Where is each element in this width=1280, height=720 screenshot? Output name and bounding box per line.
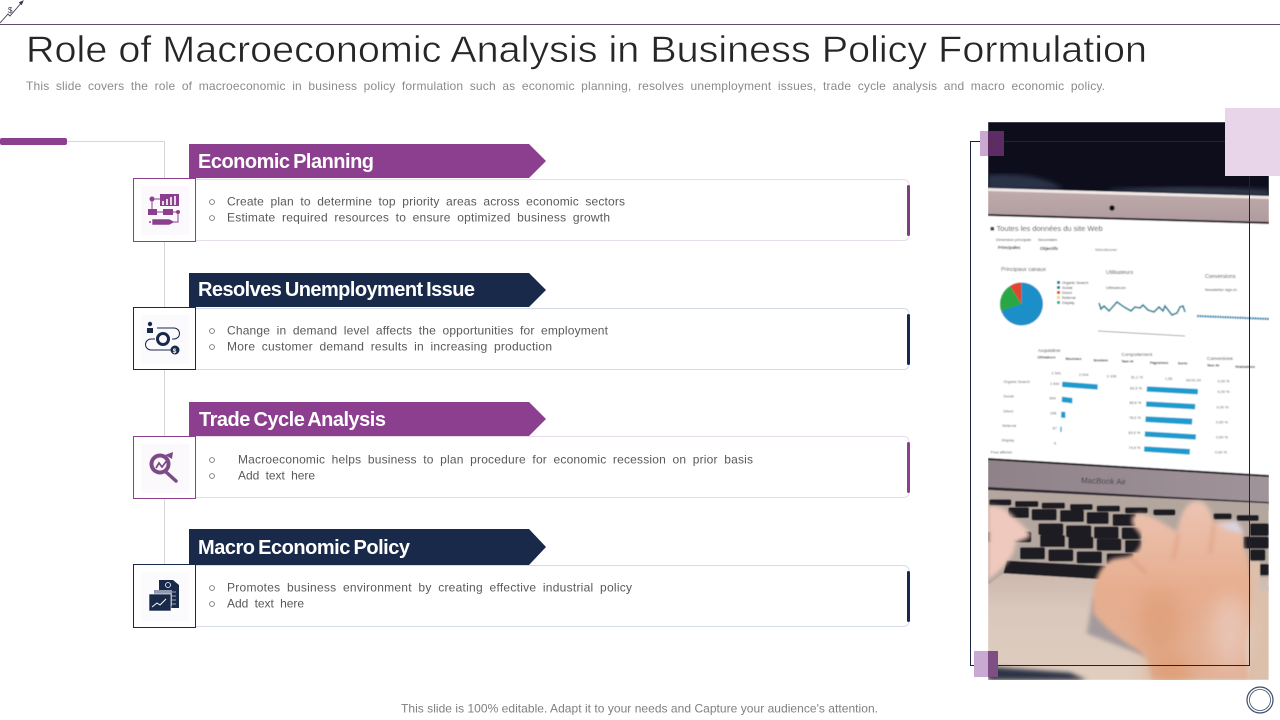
- subtitle: This slide covers the role of macroeconomic in business policy formulation such as economic planning, resolves unemployment issues, trade cycle analysis and macro economic policy.: [26, 79, 1105, 93]
- icon: double ring: [1247, 687, 1273, 713]
- icon: dollar growth arrow: [0, 1, 23, 23]
- dashboard table: Organic Search: [1003, 380, 1030, 384]
- dashboard text: Principaux canaux: [1001, 267, 1046, 273]
- dashboard table: 74,6 %: [1129, 446, 1141, 450]
- footer note: This slide is 100% editable. Adapt it to your needs and Capture your audience's attention.: [401, 702, 878, 716]
- line chart: [1098, 302, 1269, 336]
- dashboard table: 0,00 %: [1216, 436, 1229, 440]
- icon: people and gear: [134, 308, 196, 370]
- dashboard text: Principales: [998, 245, 1021, 250]
- dashboard table: 1,55: [1165, 377, 1172, 381]
- dashboard table: 1 640: [1050, 382, 1060, 386]
- dashboard text: ■ Toutes les données du site Web: [990, 224, 1103, 233]
- left hand: [988, 506, 1030, 581]
- pie legend: Direct: [1062, 291, 1073, 295]
- dashboard table: Nouveaux: [1066, 357, 1082, 361]
- heading arrow: macro economic policy: [189, 529, 546, 565]
- card body: [190, 436, 910, 498]
- dashboard table: 78,0 %: [1129, 416, 1142, 420]
- dashboard table: Comportement: [1121, 352, 1153, 357]
- laptop base: [988, 459, 1269, 510]
- keyboard: [988, 490, 1269, 592]
- photo frame outline: [970, 142, 1250, 666]
- dashboard text: Sélectionner: [1095, 247, 1118, 252]
- icon: dollar growth arrow: $: [8, 6, 13, 15]
- dashboard table: 82,9 %: [1130, 386, 1143, 390]
- icon: planning flow: [134, 178, 196, 242]
- dashboard table: Referral: [1002, 424, 1016, 428]
- bullet list: Promotes business environment by creating effective industrial policy: [227, 580, 632, 594]
- pie legend: Display: [1062, 301, 1075, 305]
- dashboard table: 3 108: [1107, 374, 1116, 378]
- bullet list: Create plan to determine top priority areas across economic sectors: [227, 194, 625, 208]
- timeline accent bar: [0, 138, 67, 145]
- dashboard text: Newsletter sign-in: [1205, 287, 1237, 292]
- dashboard text: [990, 224, 1237, 292]
- dashboard table: Pages/sess.: [1150, 361, 1169, 365]
- bullet list: Change in demand level affects the opportunities for employment: [227, 324, 609, 338]
- macbook label: MacBook Air: [1081, 476, 1126, 487]
- dashboard table: Réalisations: [1235, 365, 1255, 369]
- card body: [190, 566, 910, 626]
- bullet list: [210, 452, 753, 482]
- icon: magnifier with trend: [134, 436, 196, 498]
- bullet list: [210, 194, 625, 224]
- dashboard table: [991, 348, 1255, 455]
- title: Role of Macroeconomic Analysis in Business Policy Formulation: [26, 29, 1147, 70]
- dashboard table: Social: [1003, 395, 1014, 399]
- dashboard table: Utilisateurs: [1037, 356, 1056, 360]
- dashboard table: 6: [1054, 442, 1056, 446]
- dashboard table: 2 541: [1052, 372, 1061, 376]
- bullet list: Macroeconomic helps business to plan procedure for economic recession on prior basis: [238, 452, 753, 466]
- dashboard text: Utilisateurs: [1106, 285, 1126, 290]
- dashboard table: 81,1 %: [1131, 376, 1144, 380]
- dashboard table: Direct: [1003, 409, 1014, 413]
- screen bezel background: [988, 122, 1269, 202]
- dashboard table: Acquisition: [1038, 348, 1061, 353]
- dashboard table: Sessions: [1093, 358, 1108, 362]
- dashboard table: Pour afficher: [991, 450, 1013, 454]
- heading arrow: economic planning: Economic Planning: [198, 151, 374, 173]
- dashboard text: Utilisateurs: [1106, 270, 1133, 276]
- dashboard table: Taux de: [1207, 364, 1219, 368]
- photo: laptop with analytics dashboard: [988, 122, 1269, 685]
- heading arrow: trade cycle analysis: [189, 402, 546, 436]
- card body: [190, 180, 910, 240]
- card body: [190, 308, 910, 370]
- dashboard table: Display: [1002, 439, 1014, 443]
- dashboard table: 00:01:20: [1186, 379, 1201, 383]
- heading arrow: trade cycle analysis: Trade Cycle Analysis: [199, 409, 386, 431]
- dashboard table: 83,9 %: [1128, 431, 1141, 435]
- decorative square: upper left of photo: [980, 131, 1004, 156]
- panel: resolves unemployment issue: [134, 273, 910, 370]
- dashboard table: 0,00 %: [1218, 380, 1230, 384]
- pie legend: Social: [1062, 286, 1072, 290]
- bullet list: Add text here: [227, 596, 304, 610]
- dashboard table: 0,00 %: [1217, 405, 1229, 409]
- timeline connector: [60, 142, 164, 565]
- dashboard table: 0,00 %: [1215, 451, 1228, 455]
- right hand: [1093, 501, 1251, 685]
- palm rest: [988, 562, 1269, 680]
- pie legend: Referral: [1062, 296, 1076, 300]
- dashboard table: Conversions: [1207, 356, 1234, 361]
- pie legend: [1057, 281, 1088, 305]
- dashboard table: 156: [1050, 412, 1056, 416]
- heading arrow: resolves unemployment issue: Resolves Unemployment Issue: [198, 279, 475, 301]
- panel: macro economic policy: [134, 529, 910, 628]
- dashboard table: 544: [1049, 396, 1057, 400]
- dashboard table: 2 044: [1079, 373, 1089, 377]
- bullet list: [210, 324, 609, 354]
- bullet list: Add text here: [238, 468, 315, 482]
- heading arrow: resolves unemployment issue: [189, 273, 546, 307]
- heading arrow: macro economic policy: Macro Economic Policy: [198, 537, 411, 559]
- panel: economic planning: [134, 144, 910, 242]
- dashboard table: Taux de: [1121, 360, 1134, 364]
- dashboard text: Conversions: [1205, 274, 1236, 280]
- dashboard table: Durée: [1178, 362, 1188, 366]
- decorative square: top right: [1225, 108, 1280, 176]
- bullet list: More customer demand results in increasing production: [227, 340, 552, 354]
- dashboard text: Objectifs: [1040, 246, 1059, 251]
- dashboard text: Secondaire: [1038, 238, 1057, 242]
- pie legend: Organic Search: [1062, 281, 1088, 285]
- dashboard text: Dimension principale: [996, 238, 1031, 242]
- panel: trade cycle analysis: [134, 402, 910, 498]
- pie chart: [1000, 282, 1043, 326]
- dashboard table: 0,00 %: [1218, 390, 1230, 394]
- laptop screen: [988, 216, 1269, 476]
- dashboard table: 0,00 %: [1216, 420, 1229, 424]
- laptop lid edge: [988, 190, 1269, 226]
- decorative square: lower left of photo: [974, 651, 998, 677]
- bullet list: [210, 580, 632, 610]
- dashboard table: 85,6 %: [1129, 401, 1142, 405]
- bullet list: Estimate required resources to ensure optimized business growth: [227, 210, 610, 224]
- icon: people and gear: $: [173, 348, 177, 355]
- heading arrow: economic planning: [189, 144, 546, 178]
- header rule: [0, 24, 1280, 25]
- icon: policy documents and chart: [134, 564, 196, 628]
- dashboard table: 67: [1053, 426, 1057, 430]
